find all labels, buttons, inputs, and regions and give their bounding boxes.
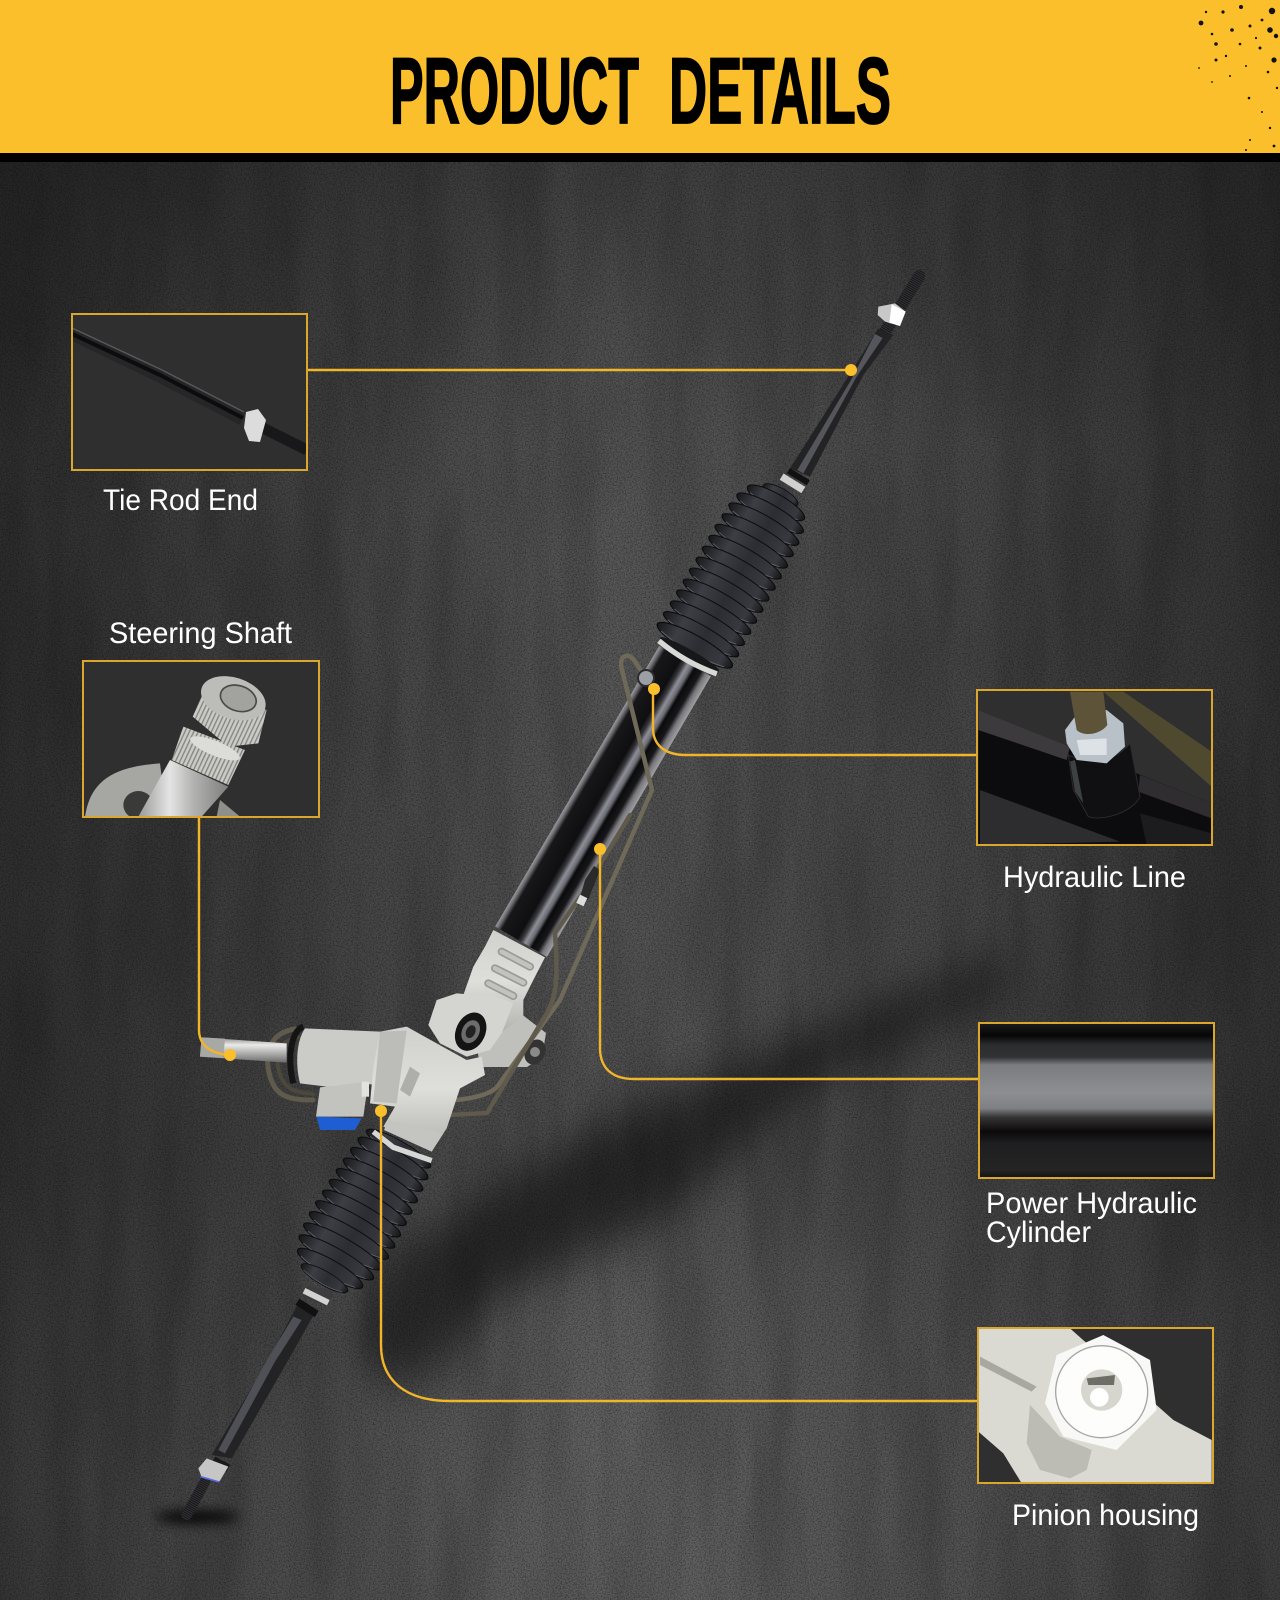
leader: power hydraulic cylinder	[594, 843, 979, 1079]
label: power hydraulic cylinder: Power Hydraulic	[986, 1187, 1197, 1220]
leader: hydraulic line	[648, 683, 977, 755]
panel: pinion housing	[978, 1328, 1213, 1483]
label: steering shaft: Steering Shaft	[109, 617, 293, 650]
mounting boss with grommet	[428, 993, 513, 1057]
left hydraulic loop behind housing	[268, 1029, 313, 1100]
upper rod, nut, thread and boot	[649, 276, 919, 681]
title: PRODUCT	[390, 38, 639, 143]
leader: pinion housing	[375, 1105, 978, 1401]
header band	[0, 0, 1280, 162]
valve block	[316, 1082, 368, 1117]
leader: steering shaft	[199, 817, 236, 1061]
label: pinion housing: Pinion housing	[1012, 1499, 1199, 1532]
panel: tie rod end	[72, 314, 307, 470]
lower rod, nut, thread and boot	[187, 1119, 442, 1515]
panel: hydraulic line	[977, 690, 1212, 845]
input housing cylinder	[297, 1028, 380, 1087]
label: power hydraulic cylinder	[986, 1187, 1197, 1249]
label: hydraulic line: Hydraulic Line	[1003, 861, 1186, 894]
black o-ring	[290, 1027, 303, 1083]
panel: steering shaft	[83, 661, 319, 819]
right mount boss	[470, 1000, 550, 1068]
input shaft	[200, 1037, 287, 1063]
title: DETAILS	[669, 38, 891, 143]
leader: tie rod end	[307, 364, 857, 376]
steering rack product illustration	[187, 276, 919, 1515]
power cylinder tube	[495, 646, 711, 957]
lower boot bellows	[282, 1119, 442, 1307]
lower housing neck and clamp over boot	[373, 1120, 443, 1161]
small bolt on tube bracket	[576, 866, 600, 906]
cast shadow of the steering rack	[155, 955, 1010, 1523]
label: tie rod end: Tie Rod End	[103, 484, 258, 517]
blue caps	[317, 1117, 362, 1130]
ink spatter in header corner	[1198, 5, 1278, 151]
label: power hydraulic cylinder: Cylinder	[986, 1216, 1091, 1249]
ribbed neck	[463, 930, 545, 1033]
aluminium housing	[200, 930, 545, 1152]
hydraulic lines over tube	[448, 656, 652, 1115]
fitting on tube	[638, 670, 654, 686]
upper boot bellows	[649, 468, 821, 681]
panel: power hydraulic cylinder	[979, 1023, 1214, 1178]
main valve body	[370, 1027, 485, 1152]
